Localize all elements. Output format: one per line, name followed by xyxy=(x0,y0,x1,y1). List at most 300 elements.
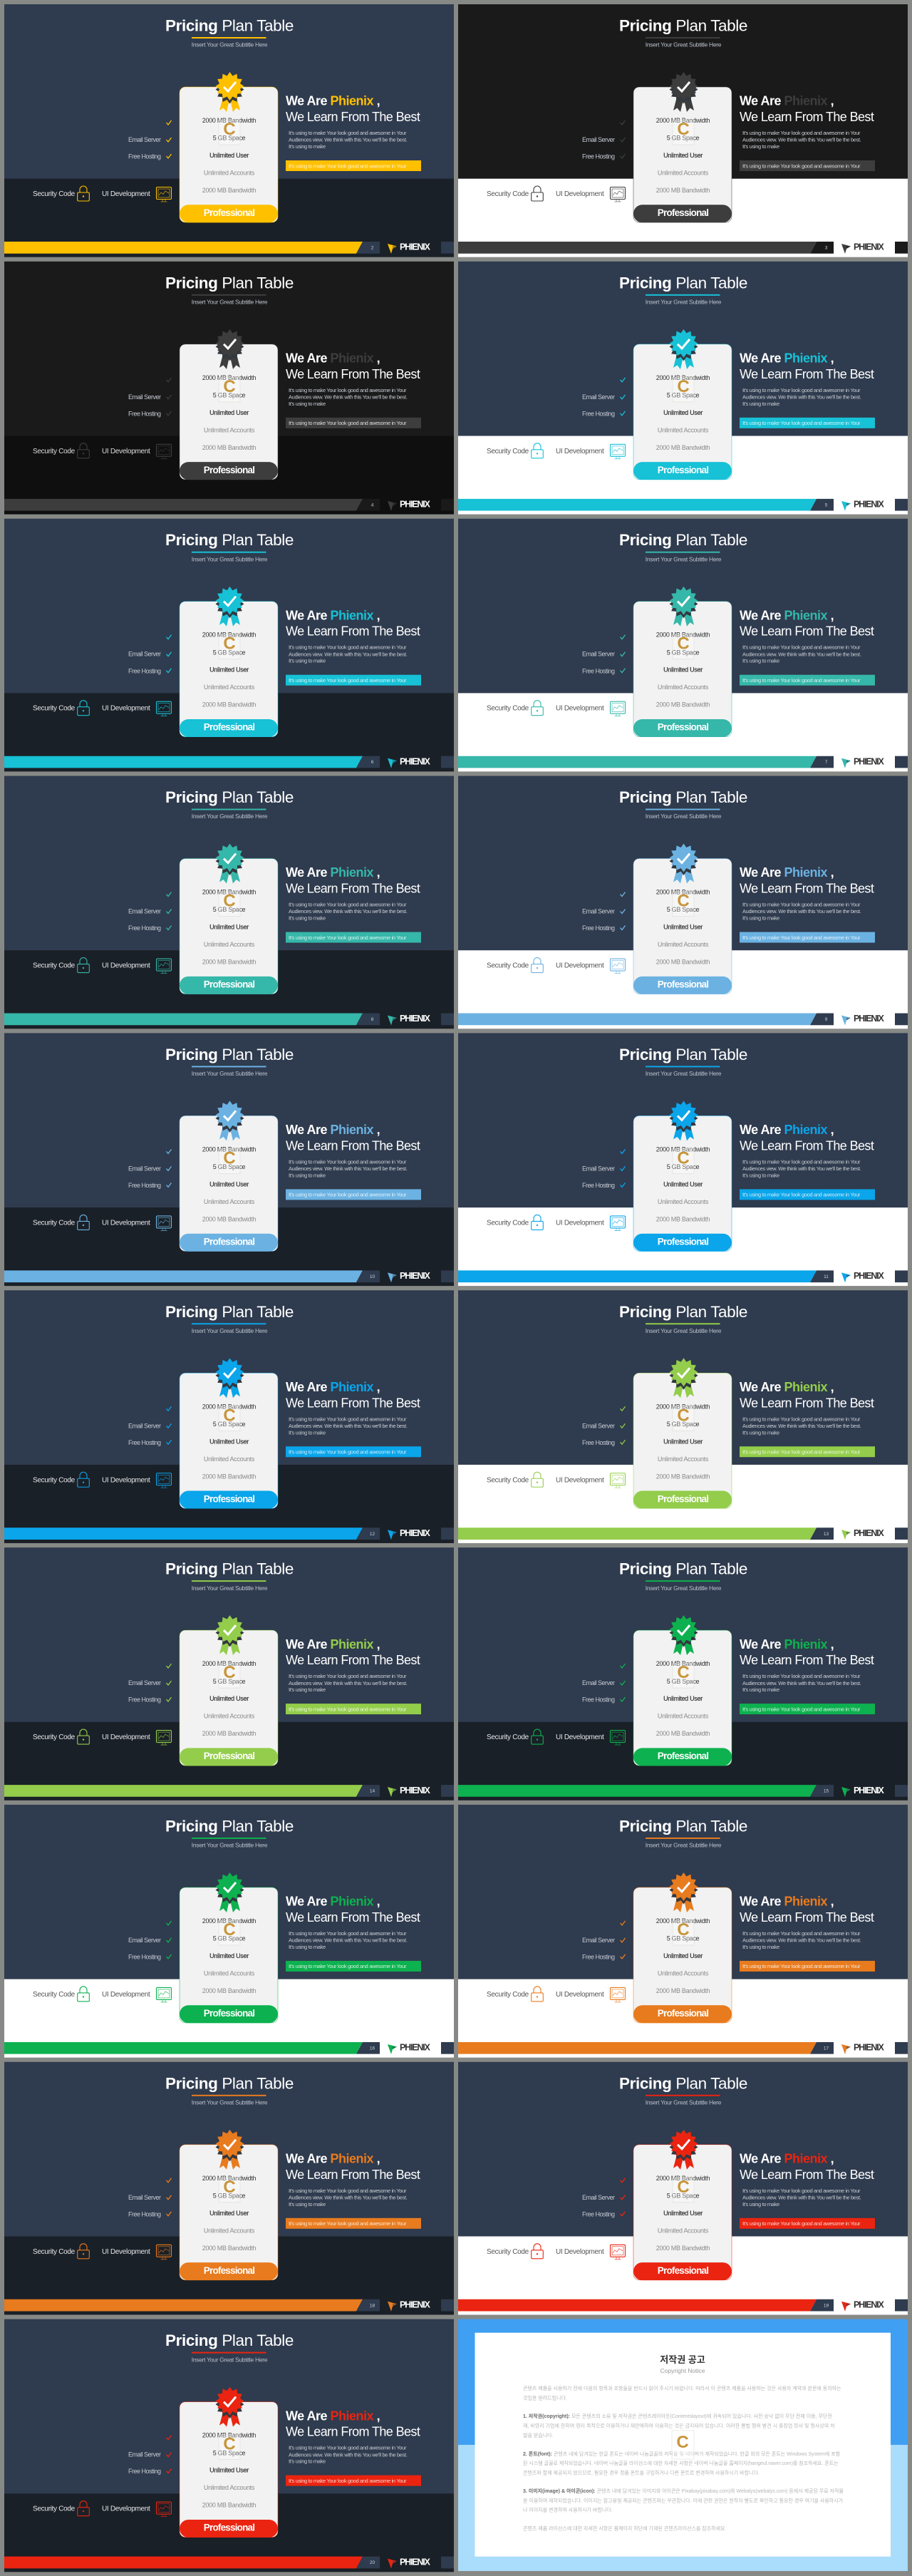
feature rows: 5 GB Space xyxy=(213,2449,246,2456)
body text: It's using to make xyxy=(742,1429,779,1436)
logo xyxy=(388,2299,430,2312)
slide 8: teal on navy xyxy=(4,776,454,1029)
footer bar: 18 xyxy=(370,2303,375,2308)
body text: It's using to make xyxy=(289,1686,326,1693)
footer bar xyxy=(4,756,454,768)
body text: It's using to make Your look good and awesome in Your xyxy=(742,644,861,651)
footer bar xyxy=(4,2557,454,2568)
watermark: C xyxy=(223,1148,236,1168)
highlight box: It's using to make Your look good and awesome in Your xyxy=(742,934,861,941)
plan card xyxy=(633,1101,732,1252)
security code xyxy=(487,1987,543,2001)
body text: It's using to make Your look good and awesome in Your xyxy=(742,130,861,136)
notice body: 을 이용하여 제작되었습니다. 이미지는 참고용일 제공되는 콘텐츠와는 무관합니다. 이에 관련 권한은 원작자 별도로 확인하고 필요한 경우 여기를 사용하시거 xyxy=(523,2498,843,2503)
feature rows: 2000 MB Bandwidth xyxy=(656,889,710,896)
title: Pricing Plan Table xyxy=(619,2074,747,2092)
logo xyxy=(388,1528,430,1540)
title underline xyxy=(192,2095,266,2096)
plan card xyxy=(180,72,278,222)
body text: It's using to make Your look good and awesome in Your xyxy=(289,2188,407,2194)
body text: It's using to make Your look good and awesome in Your xyxy=(289,130,407,136)
watermark xyxy=(219,377,240,402)
footer bar: 11 xyxy=(824,1274,829,1279)
plan card xyxy=(633,1358,732,1509)
feature rows: Unlimited User xyxy=(209,1695,249,1702)
plan name pill xyxy=(180,205,278,222)
feature checklist: Email Server xyxy=(582,393,615,401)
feature checklist: Email Server xyxy=(582,136,615,143)
feature rows: 2000 MB Bandwidth xyxy=(656,701,710,709)
security code: Security Code xyxy=(487,448,529,455)
title: Pricing Plan Table xyxy=(619,1303,747,1321)
feature checklist xyxy=(128,2178,171,2217)
feature rows: 5 GB Space xyxy=(213,2193,246,2200)
feature rows: 5 GB Space xyxy=(213,1935,246,1942)
background xyxy=(4,4,454,257)
feature rows: 2000 MB Bandwidth xyxy=(202,1215,256,1222)
feature checklist xyxy=(582,1149,626,1189)
body text: Audiences view. We think with this You we'll be the best. xyxy=(742,137,861,143)
feature rows: 2000 MB Bandwidth xyxy=(656,444,710,451)
title underline xyxy=(646,1323,720,1324)
title: Pricing Plan Table xyxy=(619,788,747,806)
body text: Audiences view. We think with this You we'll be the best. xyxy=(742,2195,861,2201)
subtitle: Insert Your Great Subtitle Here xyxy=(192,2099,268,2106)
feature rows: 2000 MB Bandwidth xyxy=(656,187,710,194)
UI development: UI Development xyxy=(102,190,150,198)
watermark xyxy=(673,1663,694,1688)
feature checklist: Free Hosting xyxy=(582,1954,615,1961)
title: Pricing Plan Table xyxy=(619,274,747,292)
body text: It's using to make xyxy=(289,1944,326,1950)
background xyxy=(458,1805,908,2058)
security code xyxy=(487,1472,543,1487)
body text: It's using to make xyxy=(742,2201,779,2207)
subtitle: Insert Your Great Subtitle Here xyxy=(192,1070,268,1077)
background xyxy=(458,1033,908,1286)
title underline xyxy=(192,1580,266,1582)
body text: It's using to make Your look good and awesome in Your xyxy=(289,387,407,393)
title: Pricing Plan Table xyxy=(619,531,747,549)
background xyxy=(4,1290,454,1543)
heading: We Are Phienix , xyxy=(740,1123,834,1137)
background xyxy=(458,776,908,1029)
plan name pill xyxy=(180,2262,278,2280)
feature rows: 2000 MB Bandwidth xyxy=(656,1917,710,1925)
slide 13: green on navy and white xyxy=(458,1290,908,1543)
ribbon badge xyxy=(670,1615,698,1655)
security code xyxy=(487,958,543,973)
heading: We Are Phienix , xyxy=(740,1380,834,1394)
body text: It's using to make Your look good and awesome in Your xyxy=(289,1930,407,1937)
subtitle: Insert Your Great Subtitle Here xyxy=(646,1585,722,1592)
feature rows: 2000 MB Bandwidth xyxy=(202,1660,256,1667)
highlight box: It's using to make Your look good and awesome in Your xyxy=(742,1449,861,1456)
subheading: We Learn From The Best xyxy=(286,2425,420,2439)
ribbon badge xyxy=(215,1615,244,1655)
feature rows: 2000 MB Bandwidth xyxy=(202,2175,256,2182)
security code: Security Code xyxy=(487,2248,529,2256)
footer bar xyxy=(458,1785,908,1797)
plan name pill: Professional xyxy=(658,1493,708,1504)
plan card xyxy=(180,2130,278,2280)
watermark xyxy=(219,2178,240,2203)
watermark: C xyxy=(677,1406,690,1425)
heading: We Are Phienix , xyxy=(286,1637,380,1652)
background xyxy=(458,1547,908,1800)
background xyxy=(458,1290,908,1543)
ribbon badge xyxy=(215,844,244,884)
plan card xyxy=(633,587,732,737)
feature rows: Unlimited Accounts xyxy=(204,2484,255,2491)
UI development xyxy=(102,1216,171,1230)
title: Pricing Plan Table xyxy=(165,2332,294,2349)
footer bar xyxy=(458,2042,908,2054)
notice body: 1. 저작권(copyright): 모든 콘텐츠의 소유 및 저작권은 콘텐츠레이아웃(Contentslayout)에 귀속되어 있습니다. 사전 승낙 없이 무단 전재 이용, 무단전 xyxy=(523,2413,832,2419)
footer bar xyxy=(4,1785,454,1797)
feature rows: Unlimited Accounts xyxy=(658,1456,709,1463)
plan name pill: Professional xyxy=(658,2265,708,2276)
feature rows: 2000 MB Bandwidth xyxy=(202,959,256,966)
logo: PHIENIX xyxy=(854,1786,884,1796)
UI development xyxy=(556,444,626,459)
feature checklist xyxy=(582,120,626,160)
plan name pill: Professional xyxy=(658,465,708,475)
logo xyxy=(841,500,884,511)
security code xyxy=(487,1729,543,1744)
security code: Security Code xyxy=(33,962,76,970)
feature checklist: Free Hosting xyxy=(582,2210,615,2217)
feature rows: 5 GB Space xyxy=(213,392,246,399)
heading: We Are Phienix , xyxy=(740,865,834,880)
feature checklist xyxy=(128,120,171,160)
ribbon badge xyxy=(215,1358,244,1398)
footer bar xyxy=(458,1527,908,1540)
feature rows: Unlimited Accounts xyxy=(658,1713,709,1720)
feature rows: 2000 MB Bandwidth xyxy=(656,1403,710,1410)
logo xyxy=(841,2043,884,2054)
feature rows: 2000 MB Bandwidth xyxy=(656,632,710,639)
UI development: UI Development xyxy=(102,1991,150,1999)
body text: It's using to make xyxy=(742,1686,779,1693)
subtitle: Insert Your Great Subtitle Here xyxy=(192,1327,268,1334)
watermark xyxy=(219,634,240,659)
watermark xyxy=(673,120,694,145)
highlight box: It's using to make Your look good and awesome in Your xyxy=(742,1706,861,1712)
footer bar: 6 xyxy=(371,760,374,765)
subheading: We Learn From The Best xyxy=(286,1396,420,1410)
feature checklist xyxy=(128,2436,171,2475)
background xyxy=(4,262,454,515)
feature rows: 2000 MB Bandwidth xyxy=(656,1145,710,1153)
title: Pricing Plan Table xyxy=(165,788,294,806)
logo xyxy=(388,242,430,254)
feature rows: 5 GB Space xyxy=(213,649,246,656)
title underline xyxy=(646,809,720,810)
body text: It's using to make xyxy=(742,143,779,150)
footer bar: 19 xyxy=(824,2303,829,2308)
plan name pill xyxy=(180,977,278,994)
logo xyxy=(841,242,884,254)
security code xyxy=(33,1215,89,1230)
feature checklist xyxy=(128,1921,171,1961)
ribbon badge xyxy=(670,72,698,112)
UI development xyxy=(102,187,171,202)
UI development: UI Development xyxy=(556,190,604,198)
body text: Audiences view. We think with this You we'll be the best. xyxy=(289,137,408,143)
plan name pill xyxy=(180,719,278,737)
feature checklist: Free Hosting xyxy=(128,1182,161,1189)
security code: Security Code xyxy=(487,1219,529,1227)
body text: Audiences view. We think with this You we'll be the best. xyxy=(742,651,861,657)
plan card xyxy=(180,844,278,994)
plan name pill xyxy=(180,462,278,480)
feature checklist: Free Hosting xyxy=(582,1696,615,1704)
security code xyxy=(33,1987,89,2001)
plan name pill xyxy=(633,977,732,994)
feature checklist: Email Server xyxy=(128,136,161,143)
feature rows: Unlimited User xyxy=(209,924,249,931)
subheading: We Learn From The Best xyxy=(286,1653,420,1667)
background xyxy=(458,262,908,515)
subheading: We Learn From The Best xyxy=(286,1138,420,1153)
watermark xyxy=(219,1920,240,1945)
feature rows: 2000 MB Bandwidth xyxy=(202,1403,256,1410)
UI development: UI Development xyxy=(556,962,604,970)
logo xyxy=(841,1786,884,1797)
watermark xyxy=(673,892,694,917)
watermark xyxy=(673,1920,694,1945)
subheading: We Learn From The Best xyxy=(286,367,420,381)
ribbon badge xyxy=(670,1872,698,1912)
highlight box: It's using to make Your look good and awesome in Your xyxy=(289,1449,407,1456)
logo xyxy=(388,1786,430,1797)
watermark: C xyxy=(223,377,236,396)
ribbon badge xyxy=(215,2130,244,2170)
UI development: UI Development xyxy=(556,448,604,455)
feature checklist: Free Hosting xyxy=(128,410,161,417)
notice body: 3. 이미지(image) & 아이콘(icon): 콘텐츠 내에 담겨있는 이미지와 아이콘은 Pixabay(pixabay.com)와 Webalys(webalys.com) 등에서 제공된 무료 저작물 xyxy=(523,2488,844,2494)
feature checklist: Free Hosting xyxy=(128,2468,161,2475)
highlight box: It's using to make Your look good and awesome in Your xyxy=(742,677,861,684)
feature checklist: Email Server xyxy=(582,651,615,658)
feature rows: Unlimited User xyxy=(209,152,249,159)
security code: Security Code xyxy=(33,1476,76,1484)
logo: PHIENIX xyxy=(854,1014,884,1024)
subtitle: Insert Your Great Subtitle Here xyxy=(192,41,268,48)
feature rows: Unlimited User xyxy=(663,1695,703,1702)
title: Pricing Plan Table xyxy=(165,2074,294,2092)
feature rows: Unlimited Accounts xyxy=(658,426,709,433)
UI development: UI Development xyxy=(102,2248,150,2256)
feature checklist: Free Hosting xyxy=(582,1439,615,1446)
slide 15: deep green on navy xyxy=(458,1547,908,1800)
logo: PHIENIX xyxy=(854,1528,884,1538)
feature rows: 5 GB Space xyxy=(667,649,700,656)
body text: Audiences view. We think with this You we'll be the best. xyxy=(742,908,861,915)
feature rows: Unlimited Accounts xyxy=(204,1969,255,1977)
body text: It's using to make xyxy=(289,2201,326,2207)
plan name pill: Professional xyxy=(658,1751,708,1761)
plan name pill: Professional xyxy=(658,979,708,990)
highlight box: It's using to make Your look good and awesome in Your xyxy=(742,420,861,426)
feature rows: Unlimited Accounts xyxy=(204,941,255,948)
feature checklist: Email Server xyxy=(582,1422,615,1429)
body text: It's using to make Your look good and awesome in Your xyxy=(289,1158,407,1165)
title: Pricing Plan Table xyxy=(619,1817,747,1835)
highlight box xyxy=(286,160,421,171)
body text: Audiences view. We think with this You we'll be the best. xyxy=(289,651,408,657)
notice body: 콘텐츠 제품을 사용하기 전에 다음의 항목과 조항들을 반드시 읽어 주시기 바랍니다. 따라서 이 콘텐츠 제품을 사용하는 것은 사용자 계약과 본문에 동의하는 xyxy=(523,2385,841,2391)
slide 10: light blue on navy xyxy=(4,1033,454,1286)
plan name pill xyxy=(180,1748,278,1766)
subheading: We Learn From The Best xyxy=(740,2168,874,2182)
plan name pill: Professional xyxy=(204,1236,254,1247)
plan card xyxy=(633,72,732,222)
feature checklist: Free Hosting xyxy=(582,1182,615,1189)
UI development xyxy=(556,1987,626,2002)
security code xyxy=(487,443,543,458)
security code: Security Code xyxy=(487,1476,529,1484)
feature checklist: Email Server xyxy=(128,1937,161,1944)
feature checklist xyxy=(128,892,171,932)
heading: We Are Phienix , xyxy=(286,865,380,880)
feature checklist: Free Hosting xyxy=(128,1696,161,1704)
body text: It's using to make xyxy=(742,401,779,407)
security code: Security Code xyxy=(33,190,76,198)
UI development xyxy=(102,1987,171,2002)
highlight box xyxy=(286,1189,421,1200)
slide 2: yellow on navy xyxy=(4,4,454,257)
logo xyxy=(841,2299,884,2312)
feature rows: 2000 MB Bandwidth xyxy=(202,117,256,124)
notice body: 콘텐츠 제품 라이선스에 대한 자세한 사항은 홈페이지 하단에 기재된 콘텐츠라이선스를 참조하세요. xyxy=(523,2525,726,2532)
plan name pill xyxy=(180,2520,278,2538)
logo xyxy=(841,1528,884,1540)
highlight box xyxy=(286,1961,421,1972)
feature checklist xyxy=(582,1921,626,1961)
title: Pricing Plan Table xyxy=(165,1303,294,1321)
subheading: We Learn From The Best xyxy=(286,110,420,124)
feature rows: Unlimited User xyxy=(209,2210,249,2217)
subtitle: Insert Your Great Subtitle Here xyxy=(646,299,722,306)
watermark: C xyxy=(677,1663,690,1682)
watermark: C xyxy=(223,1406,236,1425)
UI development: UI Development xyxy=(556,1991,604,1999)
body text: It's using to make xyxy=(289,143,326,150)
UI development xyxy=(556,1473,626,1488)
plan card xyxy=(633,844,732,994)
heading: We Are Phienix , xyxy=(286,2152,380,2166)
feature rows: Unlimited Accounts xyxy=(204,1456,255,1463)
watermark: C xyxy=(677,1148,690,1168)
highlight box xyxy=(740,1704,875,1714)
security code xyxy=(33,443,89,458)
notice subtitle: Copyright Notice xyxy=(660,2367,705,2374)
feature checklist xyxy=(582,892,626,932)
UI development: UI Development xyxy=(102,962,150,970)
footer bar xyxy=(4,1014,454,1025)
feature rows: 2000 MB Bandwidth xyxy=(202,889,256,896)
subtitle: Insert Your Great Subtitle Here xyxy=(192,299,268,306)
feature rows: Unlimited Accounts xyxy=(658,1198,709,1205)
watermark: C xyxy=(223,2178,236,2197)
subheading: We Learn From The Best xyxy=(740,1910,874,1925)
title underline xyxy=(646,552,720,553)
logo: PHIENIX xyxy=(400,1528,430,1538)
footer bar xyxy=(458,242,908,254)
security code xyxy=(33,186,89,201)
highlight box: It's using to make Your look good and awesome in Your xyxy=(289,677,407,684)
body text: It's using to make xyxy=(289,401,326,407)
plan card xyxy=(633,1615,732,1766)
highlight box: It's using to make Your look good and awesome in Your xyxy=(742,1192,861,1198)
feature checklist: Free Hosting xyxy=(128,1439,161,1446)
slide 18: orange on navy xyxy=(4,2062,454,2315)
security code xyxy=(487,1215,543,1230)
heading: We Are Phienix , xyxy=(740,2152,834,2166)
title underline xyxy=(646,1066,720,1067)
security code: Security Code xyxy=(33,1991,76,1999)
UI development: UI Development xyxy=(102,1476,150,1484)
logo: PHIENIX xyxy=(400,1786,430,1796)
plan card xyxy=(180,2387,278,2538)
feature checklist: Free Hosting xyxy=(582,924,615,932)
feature checklist xyxy=(128,635,171,674)
security code: Security Code xyxy=(487,962,529,970)
title underline xyxy=(646,37,720,38)
body text: It's using to make xyxy=(289,915,326,922)
plan name pill: Professional xyxy=(204,2265,254,2276)
UI development: UI Development xyxy=(102,1733,150,1741)
security code: Security Code xyxy=(487,705,529,713)
heading: We Are Phienix , xyxy=(286,1380,380,1394)
background xyxy=(4,519,454,771)
body text: It's using to make xyxy=(289,658,326,664)
logo: PHIENIX xyxy=(400,500,430,510)
subheading: We Learn From The Best xyxy=(740,624,874,639)
feature checklist xyxy=(582,635,626,674)
UI development xyxy=(102,2245,171,2260)
slide 7: teal on navy and white xyxy=(458,519,908,771)
logo xyxy=(388,756,430,768)
body text: Audiences view. We think with this You we'll be the best. xyxy=(289,908,408,915)
feature rows: 2000 MB Bandwidth xyxy=(656,1473,710,1480)
subheading: We Learn From The Best xyxy=(740,110,874,124)
watermark xyxy=(219,1663,240,1688)
UI development xyxy=(102,444,171,459)
ribbon badge xyxy=(215,1101,244,1140)
title underline xyxy=(192,1838,266,1839)
ribbon badge xyxy=(215,587,244,627)
feature rows: 2000 MB Bandwidth xyxy=(656,117,710,124)
background xyxy=(4,2062,454,2315)
feature checklist: Email Server xyxy=(128,1422,161,1429)
footer bar xyxy=(4,499,454,511)
body text: It's using to make xyxy=(742,658,779,664)
feature rows: 2000 MB Bandwidth xyxy=(202,1917,256,1925)
plan name pill: Professional xyxy=(204,979,254,990)
feature rows: 2000 MB Bandwidth xyxy=(202,1987,256,1994)
slide 11: blue on navy and white xyxy=(458,1033,908,1286)
plan name pill: Professional xyxy=(658,1236,708,1247)
highlight box xyxy=(740,675,875,686)
heading: We Are Phienix , xyxy=(286,94,380,108)
feature checklist: Email Server xyxy=(582,1679,615,1686)
feature rows: Unlimited User xyxy=(209,1438,249,1445)
logo: PHIENIX xyxy=(400,1271,430,1281)
background xyxy=(458,4,908,257)
